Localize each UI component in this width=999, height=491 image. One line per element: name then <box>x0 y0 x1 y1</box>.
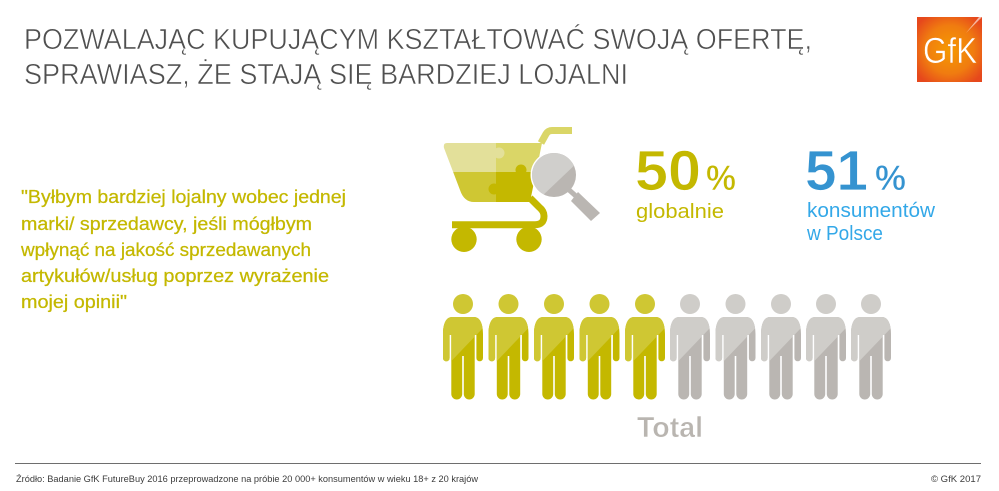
quote text: wpłynąć na jakość sprzedawanych <box>20 240 311 260</box>
GfK logo <box>917 17 982 82</box>
stat: 50% globally: 50 <box>635 139 701 203</box>
stat: 51% in Poland: w Polsce <box>806 222 883 245</box>
magnifier <box>530 152 600 221</box>
title: POZWALAJĄC KUPUJĄCYM KSZTAŁTOWAĆ SWOJĄ OFERTĘ, <box>24 23 812 56</box>
quote text: marki/ sprzedawcy, jeśli mógłbym <box>21 214 312 234</box>
stat: 51% in Poland: % <box>875 159 906 198</box>
stat: 51% in Poland: konsumentów <box>807 200 936 222</box>
copyright: © GfK 2017 <box>931 474 981 485</box>
stat: 50% globally <box>635 139 736 223</box>
cart handle <box>541 130 572 143</box>
pictogram: 10 people, 5 highlighted <box>443 294 891 399</box>
cart wheels <box>451 227 542 252</box>
title: SPRAWIASZ, ŻE STAJĄ SIĘ BARDZIEJ LOJALNI <box>24 58 628 91</box>
footer rule <box>15 463 981 464</box>
cart frame <box>452 198 544 225</box>
stat: 50% globally: globalnie <box>636 201 724 223</box>
icon: shopping cart with magnifier <box>440 130 600 252</box>
title <box>24 23 812 91</box>
quote text: artykułów/usług poprzez wyrażenie <box>21 266 329 286</box>
stat: 51% in Poland <box>805 139 936 245</box>
GfK logo: GfK <box>923 30 977 71</box>
quote text: mojej opinii" <box>21 292 127 312</box>
source note: Źródło: Badanie GfK FutureBuy 2016 przeprowadzone na próbie 20 000+ konsumentów w wieku 18+ z 20 krajów <box>16 474 478 485</box>
stat: 50% globally: % <box>706 159 736 198</box>
quote text: "Byłbym bardziej lojalny wobec jednej <box>21 187 346 207</box>
quote text <box>20 187 346 312</box>
cart basket puzzle <box>444 143 542 202</box>
pictogram label: Total <box>637 412 703 444</box>
stat: 51% in Poland: 51 <box>805 139 868 203</box>
